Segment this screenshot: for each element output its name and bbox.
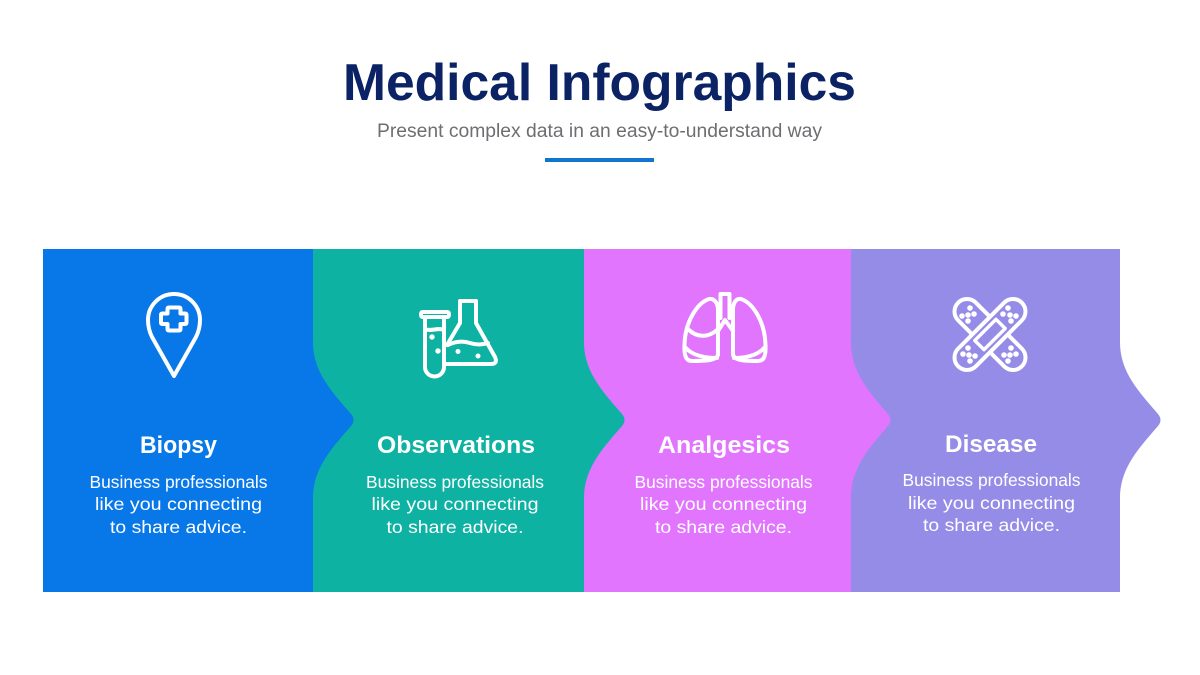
icon: location pin with medical cross [148,294,200,376]
panel: biopsy background [43,249,354,592]
panel: observations content [366,301,544,537]
text: observations description: like you connecting [372,494,538,514]
text: observations description: to share advice. [386,517,524,537]
panel: biopsy content [90,294,268,537]
text: analgesics description: to share advice. [655,517,792,537]
icon: crossed bandages [949,294,1031,375]
heading: Disease: Disease [945,431,1037,458]
heading: Observations: Observations [377,432,535,459]
text: analgesics description: like you connecting [640,494,807,514]
heading: Analgesics: Analgesics [658,432,790,459]
panel: analgesics content [634,294,813,537]
text: observations description [366,472,544,537]
text: disease description: Business professionals [902,470,1081,490]
text: disease description: like you connecting [908,493,1075,513]
icon: test tube and flask [421,301,496,376]
text: disease description [902,470,1081,535]
title: Medical Infographics [343,54,856,112]
panel: observations background [313,249,624,592]
icon: lungs [684,294,766,361]
text: analgesics description [634,472,813,537]
text: disease description: to share advice. [923,515,1060,535]
text: analgesics description: Business professionals [634,472,813,492]
text: observations description: Business professionals [366,472,544,492]
text: biopsy description: like you connecting [95,494,262,514]
text: biopsy description: Business professionals [90,472,268,492]
heading: Biopsy: Biopsy [140,432,218,459]
panel: analgesics background [584,249,890,592]
text: biopsy description [90,472,268,537]
panel: disease content [902,294,1081,535]
panel: disease background [851,249,1160,592]
subtitle: Present complex data in an easy-to-understand way [377,121,822,142]
text: biopsy description: to share advice. [110,517,247,537]
title underline [545,158,654,162]
